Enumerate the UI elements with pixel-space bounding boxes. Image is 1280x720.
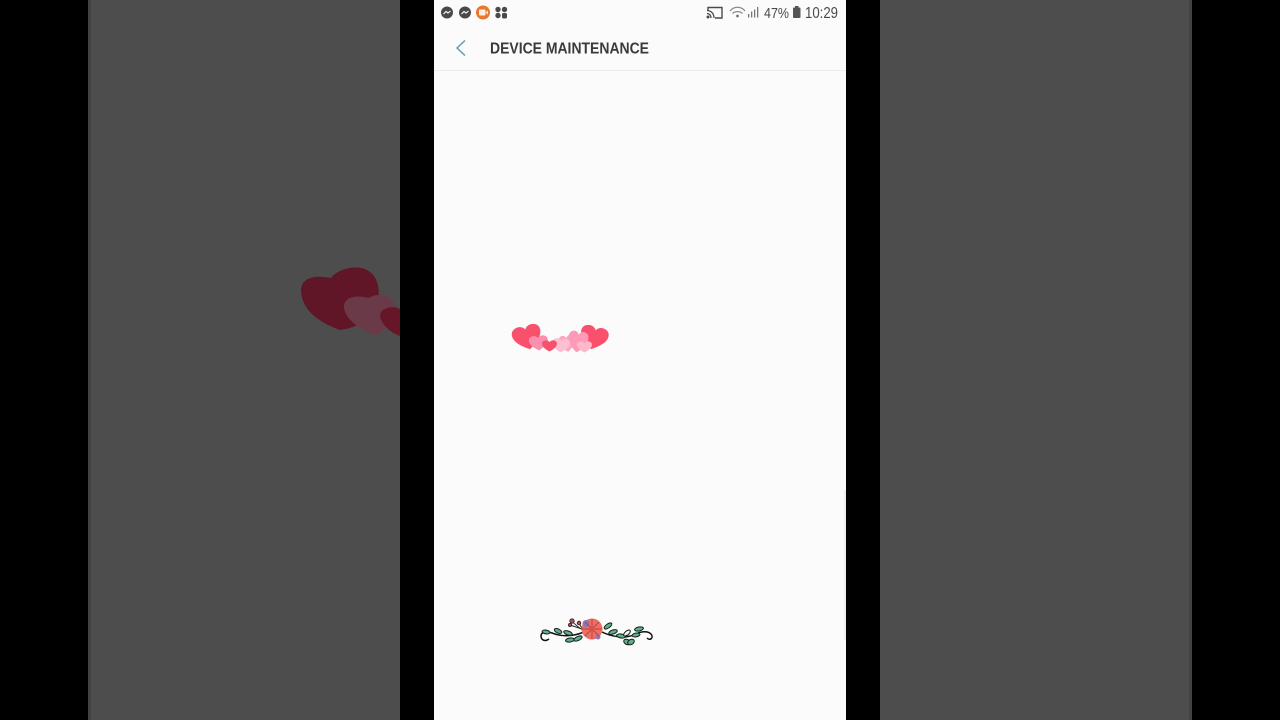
icon: messenger second — [459, 6, 471, 18]
icon: row of hearts — [510, 322, 610, 354]
panel: blurred right backdrop — [880, 0, 1192, 720]
heading: device maintenance: DEVICE MAINTENANCE — [490, 40, 649, 58]
battery percent: 47% — [764, 5, 789, 22]
icon: floral vine ornament — [541, 618, 652, 646]
icon: blurred dark red hearts — [301, 267, 400, 336]
berries — [568, 619, 581, 627]
clock: 10:29 — [805, 5, 838, 22]
icon: wifi — [730, 7, 745, 17]
icon: back arrow — [457, 40, 465, 56]
header divider — [434, 70, 846, 71]
panel: phone screen — [434, 0, 846, 720]
vine leaves — [542, 622, 644, 646]
status bar system indicators — [707, 5, 838, 22]
icon: signal bars — [748, 7, 758, 18]
vine stem — [541, 632, 652, 640]
icon: screen recorder — [476, 6, 490, 20]
panel: blurred left backdrop — [88, 0, 400, 720]
icon: messenger — [441, 6, 453, 18]
status bar notification icons — [441, 6, 507, 20]
flower — [582, 618, 602, 640]
icon: battery — [793, 6, 800, 18]
scrollbar hint — [844, 490, 846, 640]
stem to berries — [570, 621, 584, 631]
icon: cast — [707, 8, 722, 18]
icon: app grid — [495, 7, 507, 18]
